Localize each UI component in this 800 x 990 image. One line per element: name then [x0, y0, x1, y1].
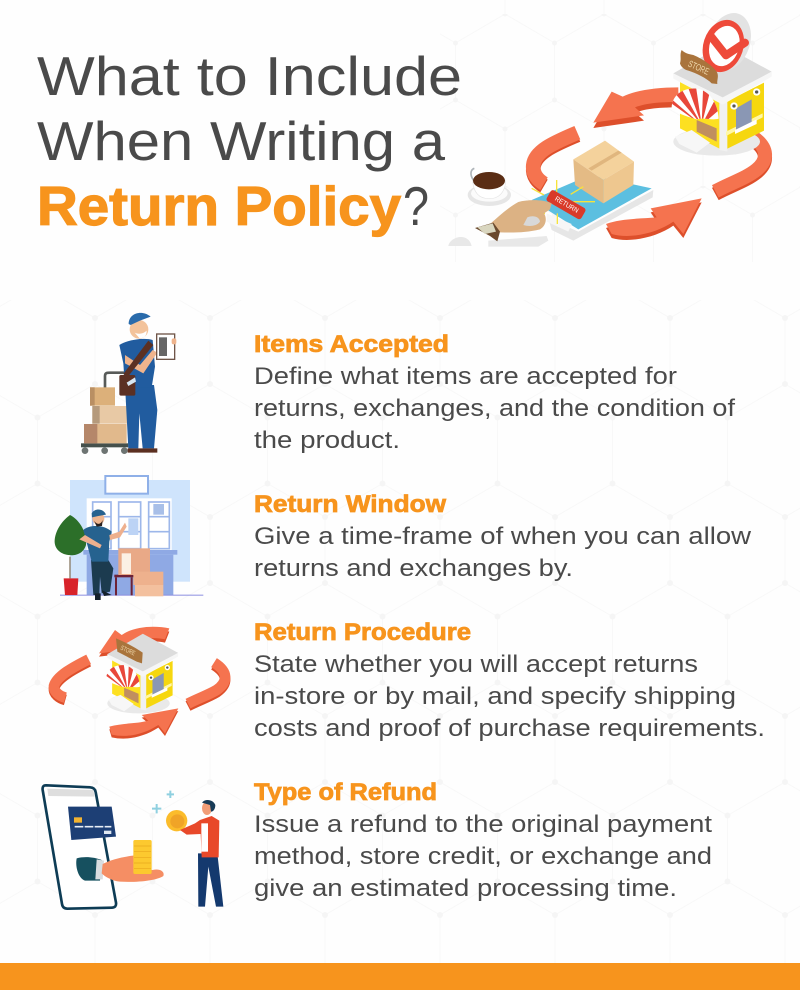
body text [254, 363, 735, 454]
heading: Type of Refund [254, 779, 437, 806]
illustration: shop clerk with boxes [55, 476, 203, 600]
icon: credit card [68, 807, 116, 840]
shop backdrop [60, 476, 203, 596]
sign text: STORE [687, 59, 711, 77]
icon: courier [119, 313, 157, 453]
icon: check badge [696, 7, 758, 78]
heading: Return Procedure [254, 619, 471, 646]
body text: give an estimated processing time. [254, 875, 677, 902]
title: What to Include [37, 45, 462, 107]
panel: return window [55, 476, 751, 600]
arrow: right arc [188, 663, 225, 706]
body text [254, 651, 765, 742]
arrow: store to phone [593, 87, 678, 128]
arrow: left arc [533, 133, 577, 186]
icon: hand [76, 855, 164, 882]
icon: shadow under hand [448, 236, 548, 247]
body text: State whether you will accept returns [254, 651, 698, 678]
heading: Return Window [254, 491, 447, 518]
title: Return Policy [37, 175, 401, 237]
body text [254, 811, 712, 902]
title: When Writing a [37, 110, 445, 172]
icon: stacked boxes [84, 387, 128, 443]
body text: the product. [254, 427, 400, 454]
body text: Define what items are accepted for [254, 363, 677, 390]
sign text: STORE [119, 645, 136, 658]
icon: store [103, 634, 178, 713]
icon: person [180, 800, 223, 907]
icon: clipboard [157, 334, 176, 359]
icon: phone [43, 785, 116, 909]
illustration: delivery man with cart [81, 313, 176, 454]
footer bar [0, 963, 800, 990]
body text: returns, exchanges, and the condition of [254, 395, 735, 422]
body text: Give a time-frame of when you can allow [254, 523, 751, 550]
illustration: store with return arrows [54, 627, 225, 739]
icon: store [667, 45, 772, 156]
panel: return procedure [54, 619, 765, 742]
illustration: phone payment and refund [43, 785, 223, 909]
illustration: return cycle between store and phone [448, 7, 772, 247]
arrow: right arc [715, 137, 765, 194]
title [37, 45, 462, 237]
icon: parcel box [573, 141, 634, 203]
icon: gold coin [166, 810, 187, 831]
icon: coffee cup [468, 168, 511, 206]
arrow: bottom [109, 708, 178, 739]
icon: plus signs [152, 791, 174, 813]
arrow: top [99, 627, 169, 657]
icon: coin stack [133, 840, 152, 874]
body text: returns and exchanges by. [254, 555, 573, 582]
icon: hand with watch [475, 200, 552, 241]
body text [254, 523, 751, 582]
icon: phone [532, 175, 653, 241]
icon: store sign [116, 638, 143, 663]
body text: Issue a refund to the original payment [254, 811, 712, 838]
icon: potted plant [55, 515, 86, 595]
heading: Items Accepted [254, 331, 449, 358]
icon: clerk [79, 509, 127, 600]
panel: items accepted [81, 313, 735, 454]
button label: RETURN [553, 196, 579, 215]
panel: type of refund [43, 779, 712, 909]
icon: parcels [114, 548, 163, 596]
arrow: left arc [54, 659, 89, 700]
body text: method, store credit, or exchange and [254, 843, 712, 870]
arrow: phone to store [606, 198, 702, 240]
icon: return button [530, 180, 595, 224]
icon: store sign [680, 50, 718, 84]
body text: costs and proof of purchase requirements. [254, 715, 765, 742]
icon: cart [81, 373, 128, 454]
title: ? [403, 175, 429, 237]
body text: in-store or by mail, and specify shipping [254, 683, 736, 710]
